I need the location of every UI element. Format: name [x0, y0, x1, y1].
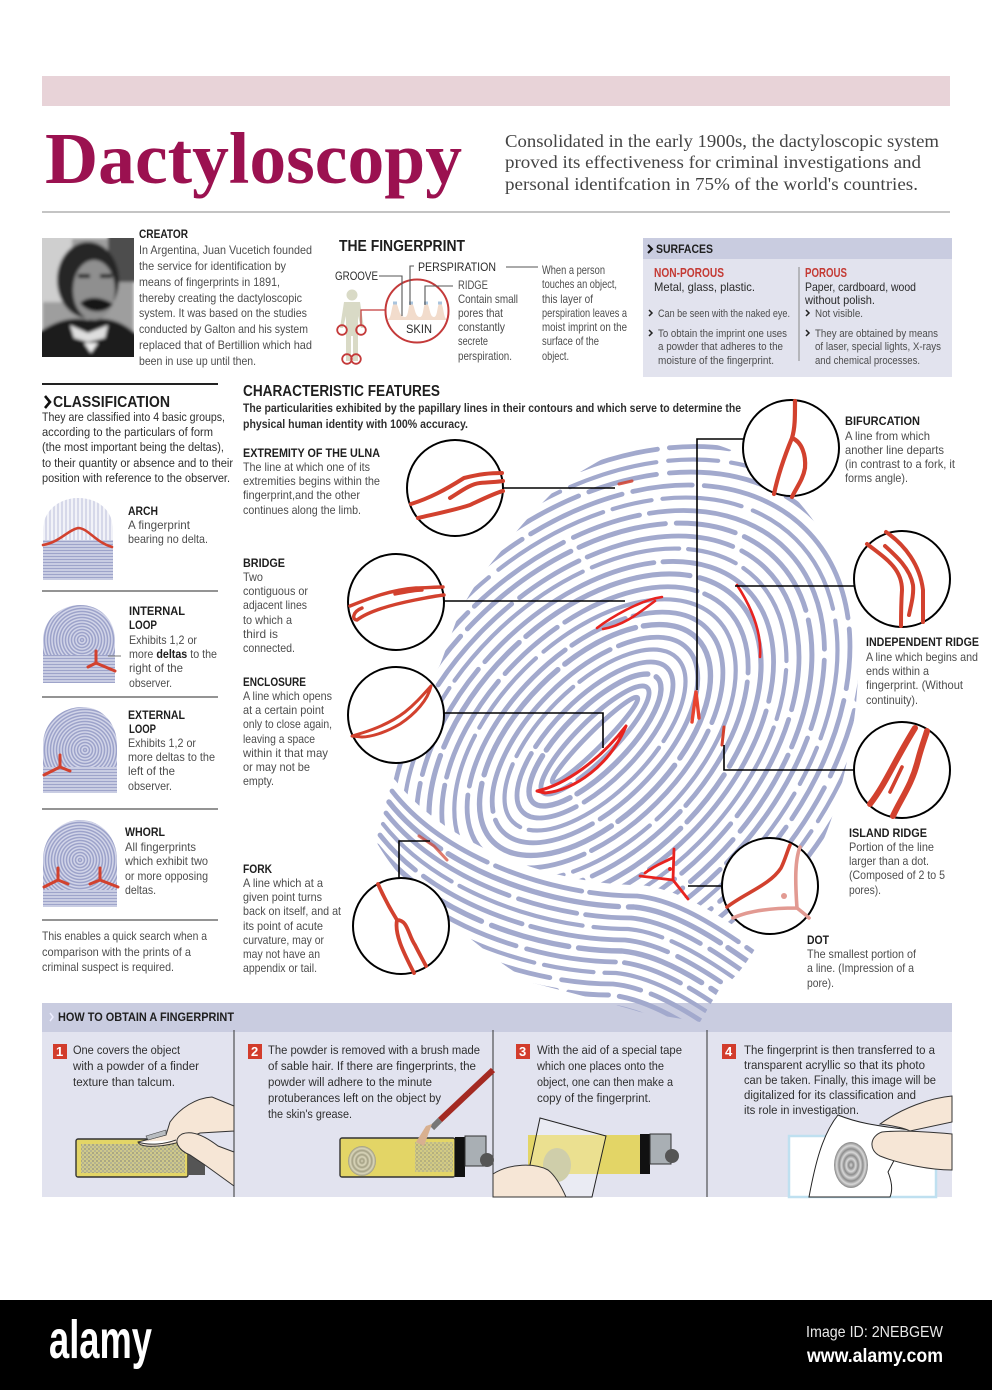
marker: delta with dot on print	[640, 849, 688, 899]
item: whorl	[43, 820, 208, 910]
feature: enclosure: A line which opens	[243, 689, 332, 703]
marker: extremity on print	[619, 481, 632, 484]
panel: the fingerprint: SKIN	[406, 322, 432, 336]
feature: fork: may not have an	[243, 947, 320, 961]
item: whorl: which exhibit two	[124, 854, 208, 868]
feature: bifurcation: forms angle).	[845, 471, 908, 485]
footer image id: www.alamy.com	[806, 1346, 943, 1367]
feature: extremity of the ulna: fingerprint,and the other	[243, 488, 360, 502]
marker: bifurcation on print	[692, 692, 699, 722]
feature: bridge: third is	[243, 627, 278, 641]
panel: characteristic features heading: The particularities exhibited by the papillary lines in their contours and which serve to determine the	[243, 401, 741, 415]
feature: island ridge	[849, 722, 950, 897]
step 4: can be taken. Finally, this image will be	[744, 1073, 936, 1087]
panel: classification: position with reference to the observer.	[42, 471, 230, 485]
panel: surfaces: To obtain the imprint one uses	[658, 328, 787, 340]
top banner bar	[42, 76, 950, 106]
icon: skin magnifier	[379, 266, 538, 342]
item: internal loop: LOOP	[129, 618, 157, 632]
item: whorl: WHORL	[125, 825, 165, 839]
panel: surfaces: SURFACES	[656, 242, 713, 256]
marker: island on print	[722, 727, 724, 745]
panel: the fingerprint: pores that	[458, 306, 504, 320]
panel: classification: to their quantity or absence and to their	[42, 456, 233, 470]
panel: surfaces	[643, 238, 952, 377]
feature: extremity of the ulna: continues along the limb.	[243, 503, 361, 517]
step 3	[516, 1043, 682, 1105]
footer bar	[0, 1300, 992, 1390]
feature: fork: curvature, may or	[243, 933, 324, 947]
feature: fork: its point of acute	[243, 919, 323, 933]
step 2 illustration	[340, 1070, 494, 1177]
panel: classification: This enables a quick search when a	[42, 929, 207, 943]
item: internal loop: right of the	[129, 661, 183, 675]
panel: the fingerprint: object.	[542, 349, 569, 363]
panel: creator: In Argentina, Juan Vucetich founded	[139, 243, 312, 257]
feature: extremity of the ulna	[243, 440, 503, 536]
panel: the fingerprint: constantly	[458, 320, 505, 334]
panel: characteristic features heading: physical human identity with 100% accuracy.	[243, 417, 468, 431]
feature: extremity of the ulna: The line at which one of its	[243, 460, 370, 474]
feature: bifurcation: (in contrast to a fork, it	[845, 457, 956, 471]
panel: surfaces: without polish.	[804, 293, 875, 307]
item: external loop: left of the	[128, 764, 175, 778]
portrait photo	[42, 238, 134, 357]
step 4: its role in investigation.	[744, 1103, 859, 1117]
step 4	[722, 1043, 936, 1117]
panel: creator: replaced that of Bertillion which had	[139, 338, 312, 352]
marker: fork on print	[419, 836, 447, 860]
feature: independent ridge	[854, 531, 979, 707]
feature: enclosure: leaving a space	[243, 732, 315, 746]
panel: classification: CLASSIFICATION	[53, 394, 170, 411]
panel: the fingerprint: THE FINGERPRINT	[339, 238, 465, 255]
feature: enclosure: or may not be	[243, 760, 310, 774]
step 4 illustration	[789, 1096, 952, 1197]
panel: surfaces: of laser, special lights, X-rays	[815, 341, 941, 353]
feature: enclosure: within it that may	[242, 746, 328, 760]
step 4: 4	[725, 1044, 733, 1059]
panel: classification: criminal suspect is required.	[42, 960, 174, 974]
footer image id	[806, 1324, 944, 1367]
marker: independent ridge on print	[737, 585, 760, 657]
feature: bifurcation	[743, 400, 956, 497]
panel: surfaces: POROUS	[805, 266, 847, 280]
feature: independent ridge: continuity).	[866, 693, 918, 707]
step 4: The fingerprint is then transferred to a	[744, 1043, 935, 1057]
panel: surfaces: Not visible.	[815, 308, 863, 320]
panel: the fingerprint: When a person	[542, 263, 605, 277]
footer image id: Image ID: 2NEBGEW	[806, 1324, 944, 1341]
footer logo: alamy	[49, 1310, 152, 1370]
feature: fork: appendix or tail.	[243, 961, 317, 975]
feature: enclosure: only to close again,	[243, 717, 332, 731]
feature: dot: a line. (Impression of a	[807, 961, 914, 975]
feature: enclosure: at a certain point	[243, 703, 325, 717]
step 2: 2	[251, 1044, 258, 1059]
item: whorl: All fingerprints	[125, 840, 196, 854]
feature: bridge: Two	[243, 570, 263, 584]
feature: bridge: to which a	[243, 613, 292, 627]
feature: dot: The smallest portion of	[807, 947, 917, 961]
item: external loop: EXTERNAL	[128, 708, 185, 722]
intro text: Consolidated in the early 1900s, the dactyloscopic system	[505, 131, 939, 151]
item: external loop	[43, 707, 215, 795]
panel: creator: means of fingerprints in 1891,	[139, 275, 280, 289]
panel: the fingerprint: perspiration.	[458, 349, 512, 363]
icon: human body	[340, 290, 364, 361]
step 3: 3	[519, 1044, 526, 1059]
panel: surfaces: NON-POROUS	[654, 266, 724, 280]
panel: the fingerprint: surface of the	[542, 334, 599, 348]
panel: creator: the service for identification by	[139, 259, 286, 273]
panel: creator: thereby creating the dactyloscopic	[139, 291, 302, 305]
panel: the fingerprint: touches an object,	[542, 277, 617, 291]
panel: surfaces: a powder that adheres to the	[658, 341, 783, 353]
item: internal loop: INTERNAL	[129, 604, 185, 618]
feature: dot: pore).	[807, 976, 834, 990]
feature: island ridge: pores).	[849, 883, 881, 897]
feature: island ridge: ISLAND RIDGE	[849, 826, 927, 840]
panel: creator	[36, 227, 312, 368]
feature: bridge: BRIDGE	[243, 556, 285, 570]
item: external loop: Exhibits 1,2 or	[128, 736, 196, 750]
panel: how to obtain a fingerprint: HOW TO OBTAIN A FINGERPRINT	[58, 1010, 235, 1024]
panel: the fingerprint: PERSPIRATION	[418, 260, 496, 274]
step 3: With the aid of a special tape	[537, 1043, 682, 1057]
feature: fork: A line which at a	[243, 876, 323, 890]
step 1 illustration	[76, 1097, 234, 1186]
feature: enclosure	[242, 667, 444, 788]
feature: fork: given point turns	[243, 890, 322, 904]
feature: independent ridge: A line which begins and	[866, 650, 978, 664]
panel: surfaces: Paper, cardboard, wood	[805, 280, 916, 294]
step 4: digitalized for its classification and	[744, 1088, 916, 1102]
step 1: 1	[56, 1044, 63, 1059]
marker: enclosure on print	[537, 726, 626, 793]
icon: hand and foot markers	[337, 310, 385, 364]
panel: classification: They are classified into 4 basic groups,	[42, 410, 225, 424]
feature: independent ridge: fingerprint. (Without	[866, 678, 964, 692]
item: internal loop: more deltas to the	[129, 647, 217, 661]
panel: creator: CREATOR	[139, 227, 188, 241]
feature: bifurcation: A line from which	[845, 429, 930, 443]
panel: classification: (the most important being the deltas),	[42, 440, 224, 454]
step 3: copy of the fingerprint.	[537, 1091, 651, 1105]
step 1: with a powder of a finder	[72, 1059, 199, 1073]
item: external loop: observer.	[128, 779, 172, 793]
panel: characteristic features heading	[243, 383, 741, 431]
feature: extremity of the ulna: EXTREMITY OF THE ULNA	[243, 446, 380, 460]
feature: bridge: adjacent lines	[243, 598, 307, 612]
main fingerprint	[377, 444, 858, 1022]
panel: creator: system. It was based on the studies	[139, 306, 307, 320]
feature: bifurcation: another line departs	[845, 443, 944, 457]
feature: extremity of the ulna: extremities begins within the	[243, 474, 380, 488]
feature: bridge: connected.	[243, 641, 295, 655]
step 2: protuberances left on the object by	[268, 1091, 442, 1105]
panel: characteristic features heading: CHARACTERISTIC FEATURES	[243, 383, 440, 400]
connector lines	[399, 439, 854, 886]
title: Dactyloscopy	[45, 117, 462, 199]
panel: surfaces: Can be seen with the naked eye.	[658, 308, 790, 320]
panel: the fingerprint: moist imprint on the	[542, 320, 627, 334]
feature: bridge: contiguous or	[243, 584, 308, 598]
step 3 illustration	[493, 1118, 679, 1197]
step 4: transparent acryllic so that its photo	[744, 1058, 925, 1072]
panel: creator: been in use up until then.	[139, 354, 256, 368]
panel: the fingerprint	[335, 238, 627, 364]
step 2: The powder is removed with a brush made	[268, 1043, 480, 1057]
step 2: of sable hair. If there are fingerprints, the	[268, 1059, 476, 1073]
item: external loop: more deltas to the	[128, 750, 215, 764]
item: internal loop: observer.	[129, 676, 172, 690]
panel: how to obtain a fingerprint	[42, 1003, 952, 1197]
item: whorl: or more opposing	[125, 869, 208, 883]
panel: surfaces: and chemical processes.	[815, 355, 920, 367]
panel: surfaces: They are obtained by means	[815, 328, 938, 340]
step 3: object, one can then make a	[537, 1075, 673, 1089]
item: arch: ARCH	[128, 504, 158, 518]
panel: the fingerprint: this layer of	[542, 292, 594, 306]
item: whorl: deltas.	[125, 883, 156, 897]
panel: classification: comparison with the prints of a	[42, 945, 191, 959]
feature: bridge	[243, 554, 444, 655]
item: arch: A fingerprint	[128, 518, 191, 532]
panel: creator: conducted by Galton and his system	[139, 322, 308, 336]
feature: fork: FORK	[243, 862, 272, 876]
intro text: proved its effectiveness for criminal investigations and	[505, 152, 921, 172]
feature: island ridge: larger than a dot.	[849, 854, 929, 868]
item: arch	[43, 498, 208, 582]
marker: bridge on print	[597, 597, 662, 629]
feature: enclosure: empty.	[243, 774, 274, 788]
panel: classification: according to the particulars of form	[42, 425, 213, 439]
panel: the fingerprint: secrete	[458, 334, 488, 348]
feature: island ridge: Portion of the line	[849, 840, 934, 854]
step 2: the skin's grease.	[268, 1107, 352, 1121]
step 1: One covers the object	[73, 1043, 180, 1057]
item: external loop: LOOP	[129, 722, 156, 736]
panel: the fingerprint: Contain small	[458, 292, 518, 306]
feature: fork: back on itself, and at	[243, 904, 342, 918]
feature: independent ridge: INDEPENDENT RIDGE	[866, 635, 979, 649]
feature: independent ridge: ends within a	[866, 664, 929, 678]
panel: surfaces: Metal, glass, plastic.	[654, 280, 755, 294]
feature: fork	[243, 862, 449, 975]
step 3: which one places onto the	[536, 1059, 664, 1073]
panel: the fingerprint: perspiration leaves a	[542, 306, 627, 320]
feature: dot	[722, 838, 917, 990]
panel: the fingerprint: GROOVE	[335, 269, 378, 283]
item: arch: bearing no delta.	[128, 532, 208, 546]
panel: the fingerprint: RIDGE	[458, 278, 488, 292]
panel: surfaces: moisture of the fingerprint.	[658, 355, 774, 367]
step 1	[53, 1043, 199, 1089]
intro text	[505, 131, 939, 194]
intro text: personal identifcation in 75% of the world's countries.	[505, 174, 918, 194]
step 2: powder will adhere to the minute	[268, 1075, 432, 1089]
feature: enclosure: ENCLOSURE	[243, 675, 306, 689]
feature: bifurcation: BIFURCATION	[845, 414, 920, 428]
feature: dot: DOT	[807, 933, 830, 947]
step 1: texture than talcum.	[73, 1075, 175, 1089]
item: internal loop: Exhibits 1,2 or	[129, 633, 197, 647]
step 2	[248, 1043, 480, 1121]
panel: classification	[42, 384, 233, 974]
feature: island ridge: (Composed of 2 to 5	[849, 868, 945, 882]
item: internal loop	[43, 604, 217, 690]
